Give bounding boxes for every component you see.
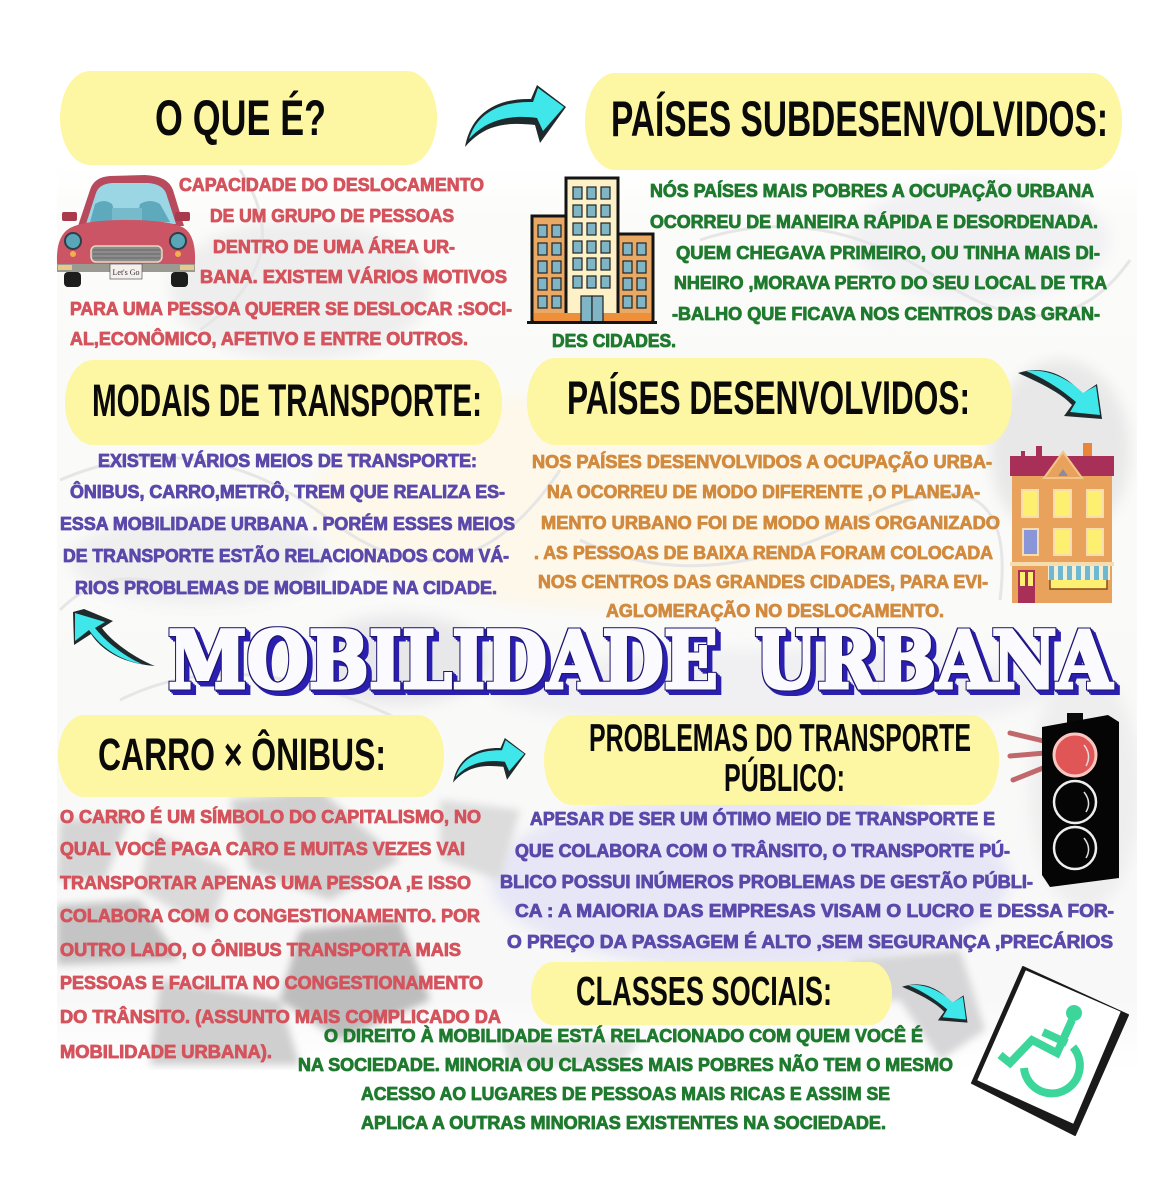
text block: classes sociais: ACESSO AO LUGARES DE PESSOAS MAIS RICAS E ASSIM SE xyxy=(361,1084,890,1104)
panel: modais de transporte heading xyxy=(65,360,502,445)
text block: modais de transporte: ESSA MOBILIDADE URBANA . PORÉM ESSES MEIOS xyxy=(60,513,515,534)
text block: carro x ônibus: TRANSPORTAR APENAS UMA PESSOA ,E ISSO xyxy=(60,873,471,893)
title: URBANA xyxy=(755,613,1113,707)
text block: modais de transporte: RIOS PROBLEMAS DE MOBILIDADE NA CIDADE. xyxy=(75,578,497,598)
text block: classes sociais xyxy=(298,1025,953,1133)
text block: carro x ônibus: O CARRO É UM SÍMBOLO DO CAPITALISMO, NO xyxy=(60,806,481,827)
text block: países desenvolvidos: NOS PAÍSES DESENVOLVIDOS A OCUPAÇÃO URBA- xyxy=(532,451,992,472)
panel: o que é heading: O QUE É? xyxy=(155,90,326,146)
icon: red car: Let's Go xyxy=(112,268,140,277)
text block: carro x ônibus: QUAL VOCÊ PAGA CARO E MUITAS VEZES VAI xyxy=(60,838,465,859)
panel: o que é heading xyxy=(60,71,437,165)
arrow: to países subdesenvolvidos xyxy=(465,85,566,147)
panel: países subdesenvolvidos heading xyxy=(585,73,1122,170)
text block: modais de transporte: EXISTEM VÁRIOS MEIOS DE TRANSPORTE: xyxy=(98,450,477,471)
text block: modais de transporte: ÔNIBUS, CARRO,METRÔ, TREM QUE REALIZA ES- xyxy=(70,481,505,502)
text block: modais de transporte xyxy=(60,450,515,598)
text block: países subdesenvolvidos: -BALHO QUE FICAVA NOS CENTROS DAS GRAN- xyxy=(672,304,1100,324)
text block: países desenvolvidos xyxy=(532,451,1000,621)
text block: países desenvolvidos: NOS CENTROS DAS GRANDES CIDADES, PARA EVI- xyxy=(538,572,988,592)
text block: o que é: PARA UMA PESSOA QUERER SE DESLOCAR :SOCI- xyxy=(70,299,512,319)
text block: o que é xyxy=(70,175,512,349)
panel: países desenvolvidos heading: PAÍSES DESENVOLVIDOS: xyxy=(567,371,970,424)
text block: países subdesenvolvidos: OCORREU DE MANEIRA RÁPIDA E DESORDENADA. xyxy=(650,211,1098,232)
text block: países desenvolvidos: AGLOMERAÇÃO NO DESLOCAMENTO. xyxy=(606,600,944,621)
text block: o que é: DE UM GRUPO DE PESSOAS xyxy=(210,206,454,226)
text block: carro x ônibus: DO TRÂNSITO. (ASSUNTO MAIS COMPLICADO DA xyxy=(60,1006,501,1027)
text block: o que é: CAPACIDADE DO DESLOCAMENTO xyxy=(179,175,484,195)
text block: classes sociais: APLICA A OUTRAS MINORIAS EXISTENTES NA SOCIEDADE. xyxy=(361,1113,886,1133)
text block: o que é: AL,ECONÔMICO, AFETIVO E ENTRE OUTROS. xyxy=(70,328,468,349)
text block: países subdesenvolvidos: NÓS PAÍSES MAIS POBRES A OCUPAÇÃO URBANA xyxy=(650,180,1094,201)
panel: problemas do transporte público heading xyxy=(544,715,999,805)
text block: carro x ônibus: OUTRO LADO, O ÔNIBUS TRANSPORTA MAIS xyxy=(60,939,461,960)
arrow: to problemas xyxy=(453,738,526,783)
icon: office buildings xyxy=(527,178,657,324)
text block: classes sociais: NA SOCIEDADE. MINORIA OU CLASSES MAIS POBRES NÃO TEM O MESMO xyxy=(298,1054,953,1075)
title xyxy=(168,613,1113,707)
text block: classes sociais: O DIREITO À MOBILIDADE ESTÁ RELACIONADO COM QUEM VOCÊ É xyxy=(324,1025,923,1046)
text block: países subdesenvolvidos: NHEIRO ,MORAVA PERTO DO SEU LOCAL DE TRA xyxy=(674,273,1107,293)
text block: problemas do transporte público: O PREÇO DA PASSAGEM É ALTO ,SEM SEGURANÇA ,PRECÁRIOS xyxy=(507,931,1113,952)
panel: problemas do transporte público heading: PÚBLICO: xyxy=(724,756,845,800)
arrow: to house xyxy=(1018,370,1102,419)
panel: modais de transporte heading: MODAIS DE TRANSPORTE: xyxy=(92,375,482,426)
icon: traffic light xyxy=(1010,713,1119,887)
text block: países desenvolvidos: NA OCORREU DE MODO DIFERENTE ,O PLANEJA- xyxy=(547,482,980,502)
text block: problemas do transporte público: BLICO POSSUI INÚMEROS PROBLEMAS DE GESTÃO PÚBLI- xyxy=(500,871,1033,892)
text block: carro x ônibus: COLABORA COM O CONGESTIONAMENTO. POR xyxy=(60,906,480,926)
title: MOBILIDADE xyxy=(168,613,718,707)
icon: red car xyxy=(57,175,195,287)
text block: países desenvolvidos: . AS PESSOAS DE BAIXA RENDA FORAM COLOCADA xyxy=(534,543,993,563)
panel: países desenvolvidos heading xyxy=(527,358,1012,445)
icon: wheelchair sign xyxy=(972,967,1128,1135)
panel: classes sociais heading: CLASSES SOCIAIS: xyxy=(576,968,832,1014)
icon: townhouse xyxy=(1010,443,1114,603)
arrow: to wheelchair sign xyxy=(902,984,968,1023)
text block: países desenvolvidos: MENTO URBANO FOI DE MODO MAIS ORGANIZADO xyxy=(541,513,1000,533)
text block: países subdesenvolvidos xyxy=(552,180,1107,351)
text block: modais de transporte: DE TRANSPORTE ESTÃO RELACIONADOS COM VÁ- xyxy=(63,545,509,566)
faded background illustration xyxy=(57,165,1140,1070)
text block: carro x ônibus xyxy=(60,806,501,1062)
text block: países subdesenvolvidos: DES CIDADES. xyxy=(552,331,676,351)
text block: o que é: DENTRO DE UMA ÁREA UR- xyxy=(213,236,455,257)
text block: o que é: BANA. EXISTEM VÁRIOS MOTIVOS xyxy=(200,266,507,287)
text block: problemas do transporte público xyxy=(500,808,1114,952)
arrow: up left to modais xyxy=(73,609,155,666)
text block: problemas do transporte público: QUE COLABORA COM O TRÂNSITO, O TRANSPORTE PÚ- xyxy=(515,840,1010,861)
text block: países subdesenvolvidos: QUEM CHEGAVA PRIMEIRO, OU TINHA MAIS DI- xyxy=(676,243,1100,263)
panel: carro x ônibus heading xyxy=(58,715,444,797)
panel: classes sociais heading xyxy=(531,962,892,1025)
text block: carro x ônibus: PESSOAS E FACILITA NO CONGESTIONAMENTO xyxy=(60,973,483,993)
text block: problemas do transporte público: APESAR DE SER UM ÓTIMO MEIO DE TRANSPORTE E xyxy=(530,808,995,829)
text block: carro x ônibus: MOBILIDADE URBANA). xyxy=(60,1042,272,1062)
panel: carro x ônibus heading: CARRO × ÔNIBUS: xyxy=(98,729,386,780)
text block: problemas do transporte público: CA : A MAIORIA DAS EMPRESAS VISAM O LUCRO E DESSA FOR- xyxy=(515,901,1114,921)
